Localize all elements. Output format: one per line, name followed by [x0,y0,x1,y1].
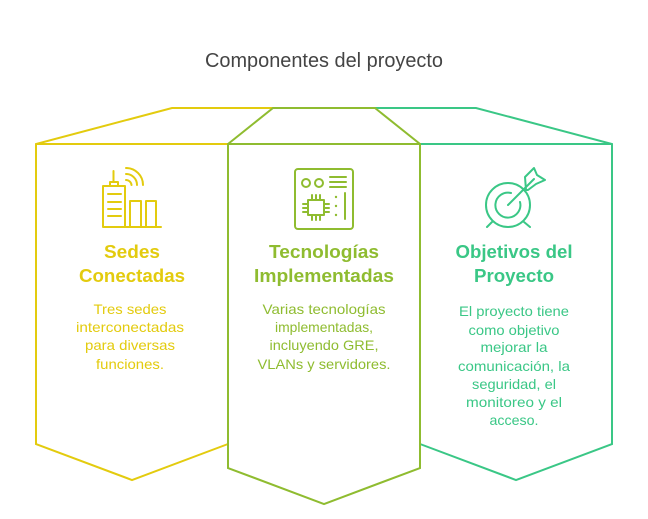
text: sedes description [76,301,184,372]
text: tecnologias description: incluyendo GRE, [270,337,378,353]
heading: sedes conectadas [79,242,185,286]
text: objetivos description: comunicación, la [458,358,570,374]
text: sedes description: para diversas [85,337,175,353]
icon: connected building [103,168,161,227]
heading: sedes conectadas: Conectadas [79,266,185,286]
text: tecnologias description: Varias tecnologías [262,301,386,317]
heading: objetivos: Objetivos del [456,242,572,262]
text: tecnologias description: VLANs y servidores. [258,356,390,372]
icon: target with arrow [486,168,545,227]
text: tecnologias description: implementadas, [275,319,373,335]
heading: sedes conectadas: Sedes [104,242,160,262]
panel: sedes conectadas [36,108,273,480]
heading: tecnologias: Tecnologías [269,242,379,262]
text: objetivos description [458,303,570,428]
panel: objetivos del proyecto [375,108,612,480]
heading: tecnologias: Implementadas [254,266,394,286]
heading: objetivos: Proyecto [474,266,554,286]
panel outline: yellow [36,108,273,480]
panel outline: teal [375,108,612,480]
panel: tecnologias implementadas [228,108,420,504]
text: tecnologias description [258,301,390,372]
text: objetivos description: acceso. [490,412,538,428]
panel outline: green [228,108,420,504]
text: objetivos description: mejorar la [480,339,548,355]
text: objetivos description: El proyecto tiene [459,303,569,319]
text: sedes description: Tres sedes [94,301,166,317]
heading: tecnologias [254,242,394,286]
text: objetivos description: monitoreo y el [466,394,562,410]
text: objetivos description: como objetivo [468,322,560,338]
text: sedes description: interconectadas [76,319,184,335]
text: sedes description: funciones. [96,356,164,372]
heading: objetivos [456,242,572,286]
text: objetivos description: seguridad, el [472,376,556,392]
icon: circuit board [295,169,353,229]
title: Componentes del proyecto [205,50,443,72]
